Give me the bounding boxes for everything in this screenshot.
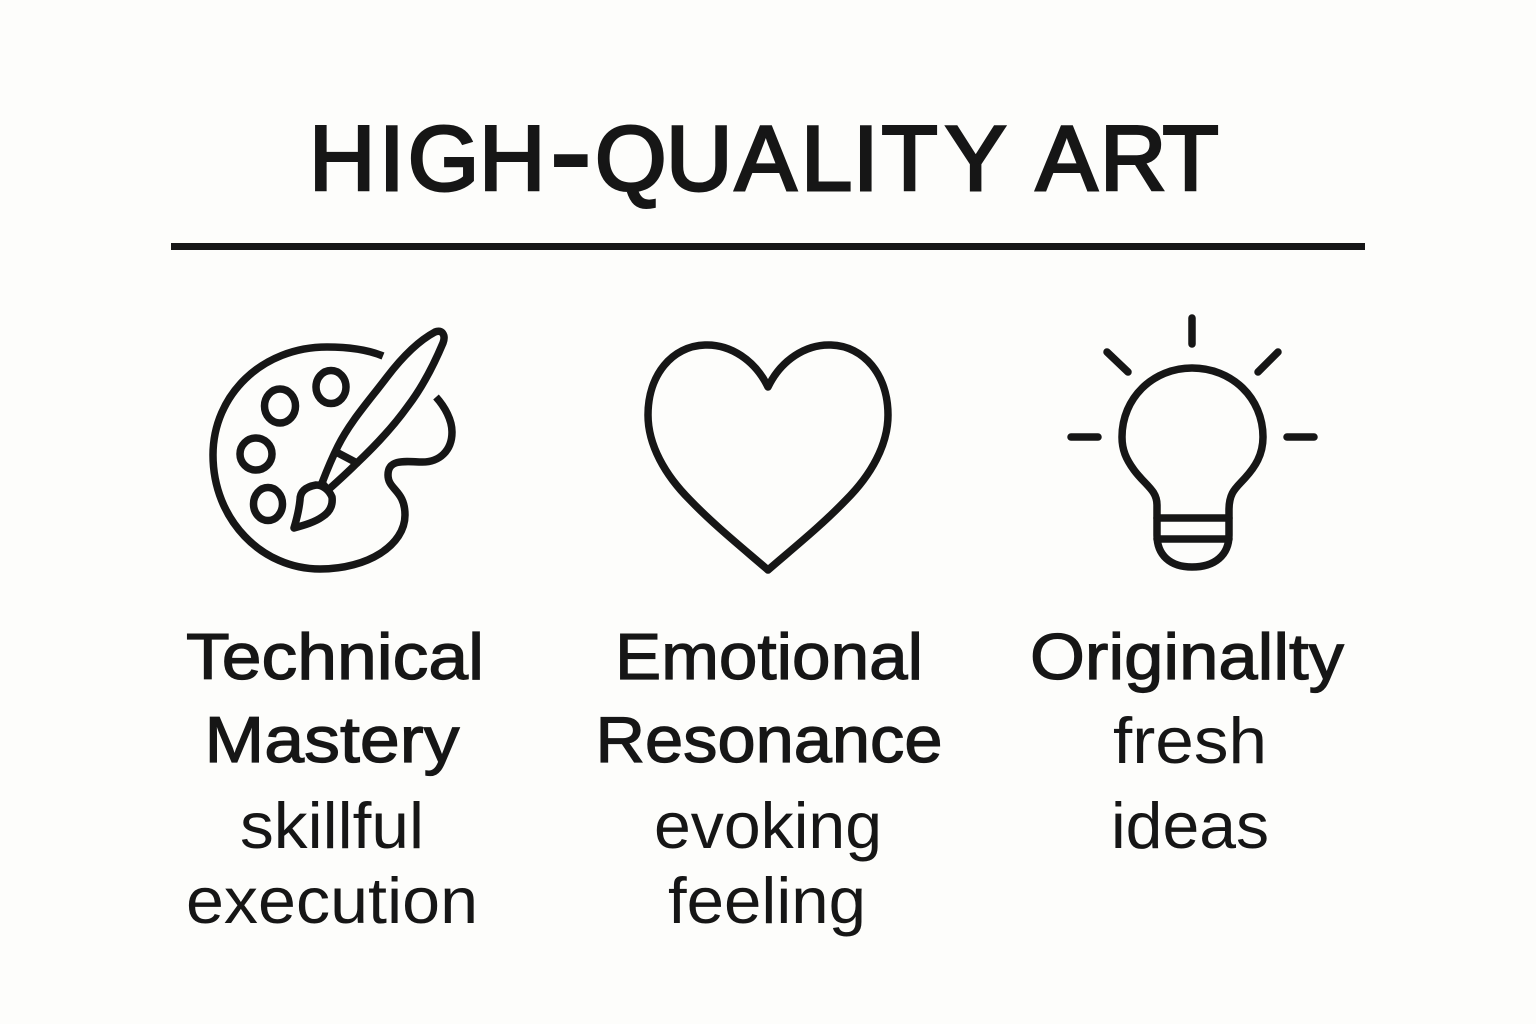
column: technical mastery: Technical	[186, 620, 484, 693]
column: emotional resonance: Resonance	[596, 703, 942, 776]
icon: light bulb	[1071, 318, 1314, 567]
column: technical mastery: execution	[186, 864, 478, 937]
column: emotional resonance: Emotional	[615, 620, 923, 693]
column: technical mastery: skillful	[240, 789, 424, 862]
icon: heart	[648, 345, 888, 570]
title: QUALITY ART	[595, 108, 1219, 210]
column: originality: ideas	[1111, 789, 1269, 862]
icon: palette and brush	[213, 331, 452, 569]
column: originality: fresh	[1113, 704, 1267, 777]
title: -	[550, 82, 592, 221]
column: technical mastery	[186, 620, 484, 937]
column: originality	[1030, 620, 1345, 862]
column: emotional resonance: evoking	[654, 789, 882, 862]
column: emotional resonance: feeling	[668, 864, 866, 937]
column: originality: Originallty	[1030, 620, 1345, 693]
column: emotional resonance	[596, 620, 942, 937]
column: technical mastery: Mastery	[204, 703, 460, 776]
title: HIGH	[309, 108, 545, 210]
title divider	[171, 243, 1365, 250]
